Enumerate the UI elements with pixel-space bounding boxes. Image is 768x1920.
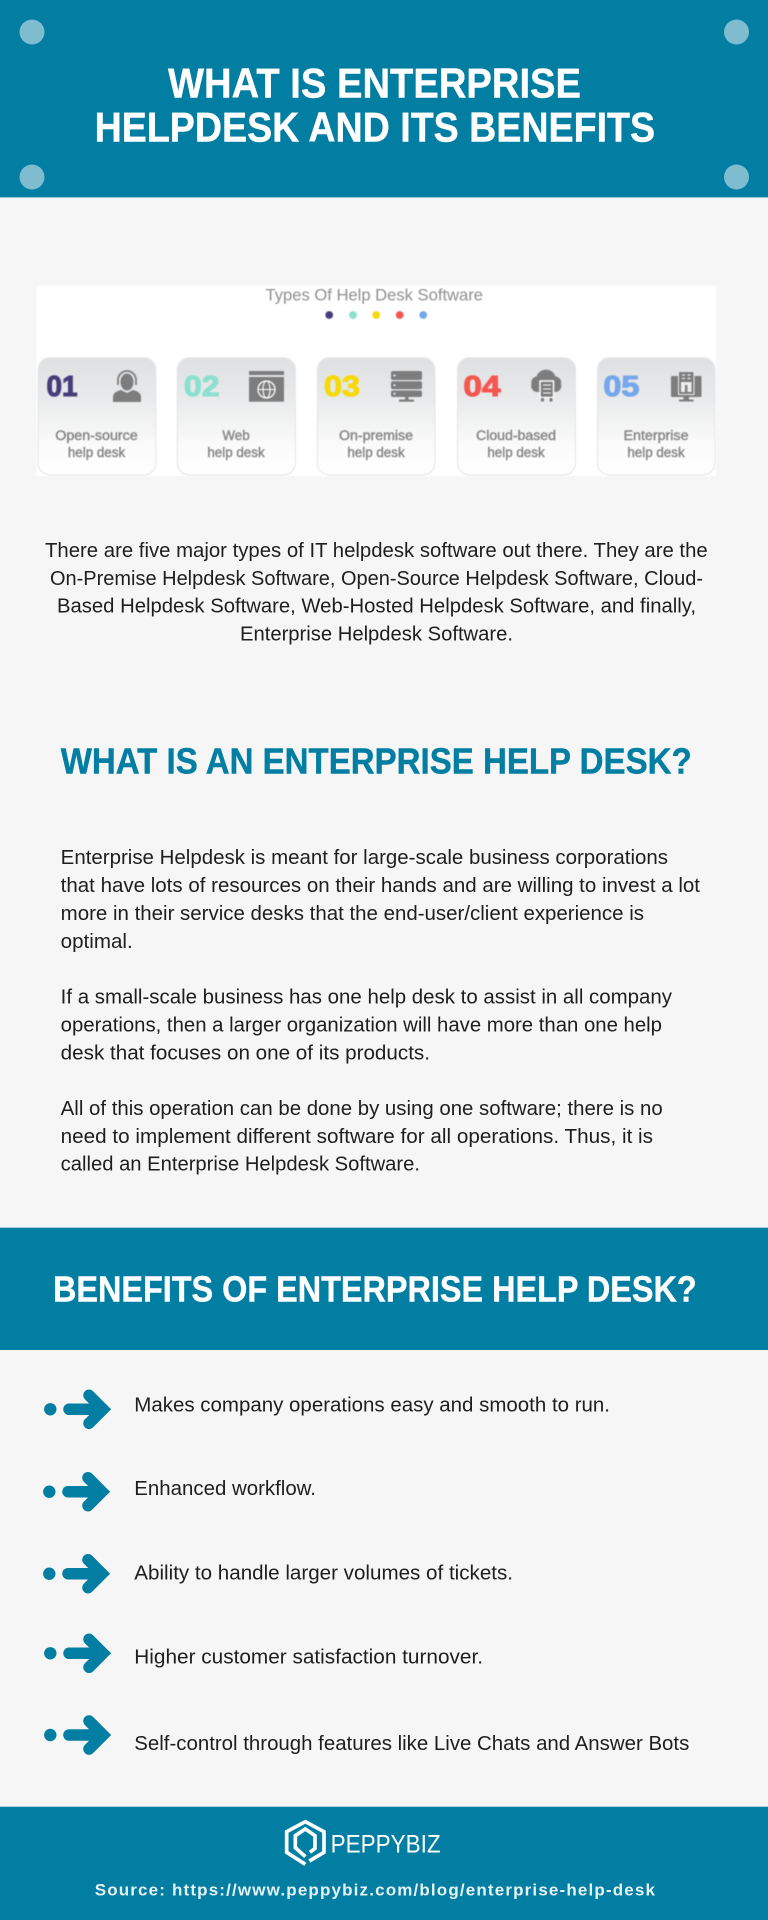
card 02: web: Web: [222, 428, 250, 443]
benefit 3: Ability to handle larger volumes of tickets.: [134, 1562, 513, 1584]
benefit 1: [44, 1395, 610, 1423]
card 02: web: [177, 358, 295, 475]
card 05: enterprise: 05: [603, 371, 639, 403]
card 03: on-premise: help desk: [347, 445, 405, 460]
intro paragraph: Based Helpdesk Software, Web-Hosted Helpdesk Software, and finally,: [57, 596, 696, 618]
paragraph 1: [61, 847, 700, 953]
paragraph 1: Enterprise Helpdesk is meant for large-scale business corporations: [61, 847, 668, 869]
card 01: open-source: help desk: [68, 445, 125, 460]
card 01: open-source: 01: [46, 371, 78, 403]
card 01: open-source: Open-source: [55, 428, 138, 443]
title: [95, 59, 655, 150]
benefit 1: Makes company operations easy and smooth to run.: [134, 1395, 610, 1417]
benefit 4: [44, 1639, 483, 1668]
body text: [61, 847, 700, 1176]
paragraph 2: desk that focuses on one of its products.: [61, 1042, 430, 1064]
paragraph 1: more in their service desks that the end-user/client experience is: [61, 903, 644, 925]
benefit 2: [43, 1478, 316, 1506]
benefits list: [43, 1395, 689, 1755]
image heading: Types Of Help Desk Software: [266, 286, 483, 305]
paragraph 2: If a small-scale business has one help desk to assist in all company: [61, 986, 672, 1008]
card 04: cloud-based: help desk: [487, 445, 545, 460]
coloured dots: [325, 311, 427, 319]
section heading: WHAT IS AN ENTERPRISE HELP DESK?: [61, 741, 692, 782]
benefit 5: Self-control through features like Live Chats and Answer Bots: [134, 1733, 689, 1755]
paragraph 3: called an Enterprise Helpdesk Software.: [61, 1154, 420, 1176]
icon: building on monitor: [671, 372, 702, 402]
paragraph 2: operations, then a larger organization will have more than one help: [61, 1014, 662, 1036]
card 03: on-premise: [317, 358, 435, 475]
card 05: enterprise: help desk: [627, 445, 685, 460]
icon: arrow: [43, 1560, 102, 1588]
benefit 3: [43, 1560, 513, 1588]
paragraph 3: [61, 1098, 663, 1176]
card 04: cloud-based: [458, 358, 576, 475]
icon: arrow: [44, 1721, 103, 1749]
benefit 5: [44, 1721, 689, 1755]
icon: web browser globe: [249, 371, 284, 402]
benefit 4: Higher customer satisfaction turnover.: [134, 1646, 483, 1668]
icon: hexagon mark: [287, 1822, 324, 1864]
card 04: cloud-based: 04: [463, 371, 501, 403]
card 04: cloud-based: Cloud-based: [476, 428, 556, 443]
panel: types of help desk software image: [37, 286, 716, 476]
paragraph 2: [61, 986, 672, 1064]
title: WHAT IS ENTERPRISE: [168, 59, 581, 106]
icon: arrow: [44, 1639, 103, 1667]
benefit 2: Enhanced workflow.: [134, 1478, 316, 1500]
peppybiz logo: PEPPYBIZ: [331, 1830, 441, 1858]
header corner dots: [20, 20, 749, 190]
card 03: on-premise: On-premise: [339, 428, 413, 443]
intro paragraph: [45, 540, 708, 645]
header banner: [0, 0, 768, 197]
intro paragraph: Enterprise Helpdesk Software.: [240, 623, 513, 645]
title: HELPDESK AND ITS BENEFITS: [95, 103, 655, 150]
icon: arrow: [43, 1478, 102, 1506]
icon: cloud with server: [531, 370, 561, 402]
card 01: open-source: [38, 358, 156, 475]
intro paragraph: There are five major types of IT helpdesk software out there. They are the: [45, 540, 708, 562]
card 05: enterprise: [598, 358, 715, 475]
benefits banner: [0, 1228, 768, 1350]
intro paragraph: On-Premise Helpdesk Software, Open-Source Helpdesk Software, Cloud-: [50, 568, 703, 590]
peppybiz logo: [287, 1822, 441, 1864]
paragraph 3: All of this operation can be done by using one software; there is no: [61, 1098, 663, 1120]
source line: Source: https://www.peppybiz.com/blog/enterprise-help-desk: [95, 1881, 656, 1900]
card 02: web: 02: [184, 371, 220, 403]
paragraph 3: need to implement different software for all operations. Thus, it is: [61, 1126, 653, 1148]
icon: arrow: [44, 1395, 103, 1423]
card 05: enterprise: Enterprise: [624, 428, 688, 443]
benefits heading: BENEFITS OF ENTERPRISE HELP DESK?: [53, 1269, 697, 1310]
icon: server stack: [391, 371, 422, 402]
card 02: web: help desk: [207, 445, 265, 460]
paragraph 1: that have lots of resources on their hands and are willing to invest a lot: [61, 875, 700, 897]
paragraph 1: optimal.: [61, 931, 133, 953]
card 03: on-premise: 03: [324, 371, 360, 403]
icon: headset agent: [113, 371, 141, 402]
footer: [0, 1807, 768, 1920]
